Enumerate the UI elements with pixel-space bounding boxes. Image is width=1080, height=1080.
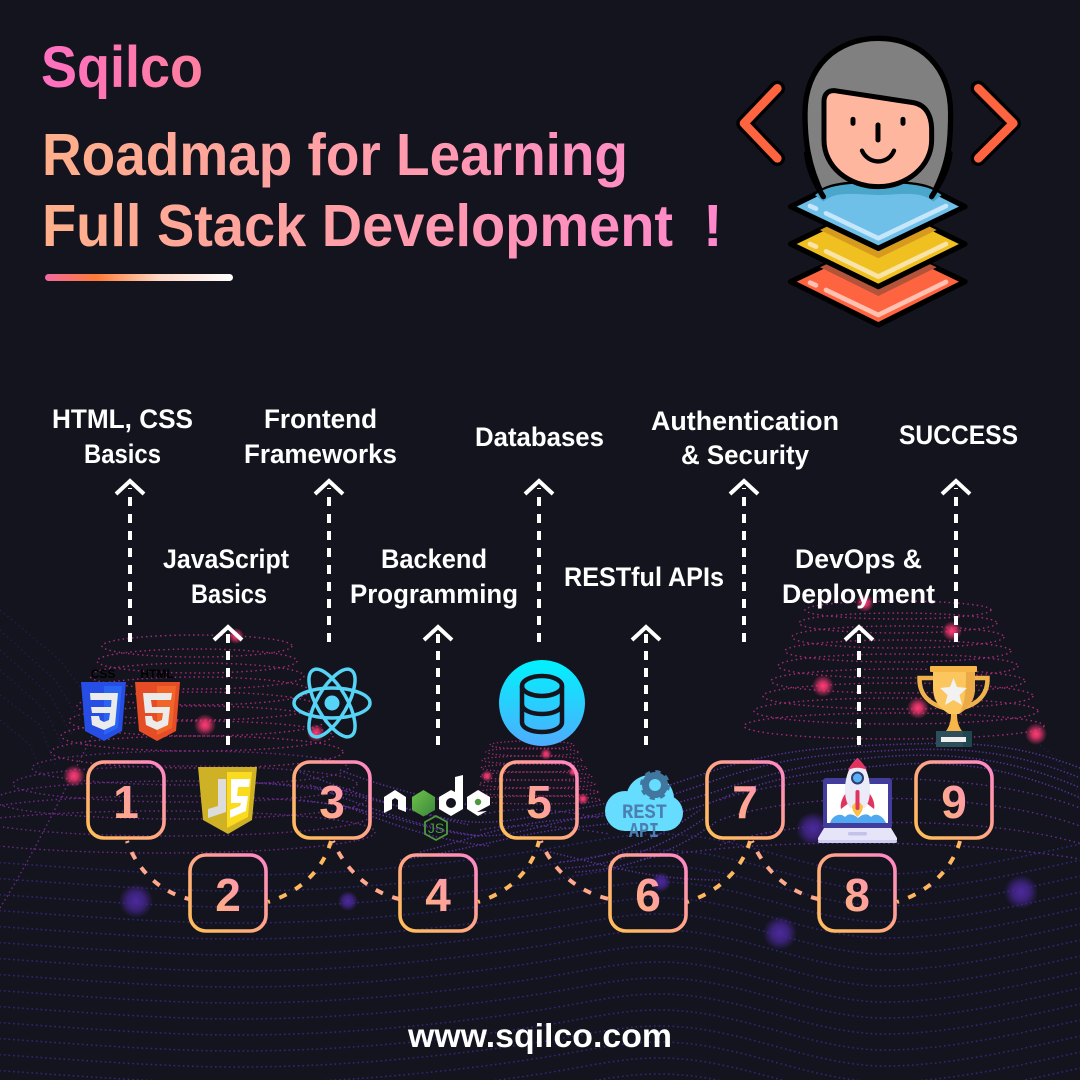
step 7 label: & Security	[681, 440, 809, 470]
icon: HTML5 shield	[135, 667, 180, 741]
step 2 label: Basics	[191, 579, 267, 609]
icon: REST API cloud: API	[629, 821, 659, 844]
step 9 box	[916, 762, 992, 838]
dotted wave background	[0, 601, 1080, 1080]
step 4 box	[400, 855, 476, 931]
icon: rocket launching from laptop	[818, 758, 897, 843]
step 6 label: RESTful APIs	[564, 562, 724, 592]
step 5 label: Databases	[475, 422, 604, 452]
step 7 box	[707, 762, 783, 838]
step 8 box: 8	[844, 869, 870, 921]
icon: CSS3 shield: CSS	[91, 667, 115, 681]
purple ridges	[255, 743, 1080, 880]
step 6 box: 6	[635, 869, 661, 921]
arrow: step 7	[730, 481, 758, 642]
icon: Node.js logo: JS	[428, 820, 444, 836]
title underline	[45, 274, 233, 281]
glowing particles	[63, 594, 1047, 950]
icon: database circle	[499, 660, 585, 746]
title	[42, 122, 723, 259]
step 2 box	[190, 855, 266, 931]
right mountain	[744, 601, 1044, 739]
step 1 box	[88, 762, 164, 838]
title: !	[703, 193, 723, 259]
step 8 label: Deployment	[782, 579, 935, 609]
icon: JavaScript shield	[198, 767, 257, 834]
icon: Node.js logo	[384, 775, 490, 840]
arrow: step 3	[315, 481, 343, 642]
step 4 label	[350, 544, 518, 609]
step 5 box	[501, 762, 577, 838]
icon: trophy	[919, 666, 988, 747]
arrow: step 4	[424, 627, 452, 745]
step 7 box: 7	[732, 776, 758, 828]
icon: React atom	[294, 663, 370, 743]
step 3 label: Frontend	[264, 404, 377, 434]
step 8 label: DevOps &	[795, 544, 922, 574]
step 8 box	[819, 855, 895, 931]
centre mountain	[476, 741, 600, 804]
step 9 label: SUCCESS	[899, 420, 1018, 450]
arrow: step 9	[942, 481, 970, 642]
step 8 label	[782, 544, 935, 609]
step 4 label: Programming	[350, 579, 518, 609]
title: Roadmap for Learning	[42, 122, 628, 188]
step 2 label	[163, 544, 289, 609]
step 3 box: 3	[319, 776, 345, 828]
arrow: step 8	[845, 627, 873, 745]
step 5 box: 5	[526, 776, 552, 828]
brand name: Sqilco	[41, 35, 203, 100]
website footer: www.sqilco.com	[407, 1017, 672, 1054]
step 2 box: 2	[215, 869, 241, 921]
arrow: step 6	[632, 627, 660, 745]
arrow: step 5	[525, 481, 553, 642]
step 1 label: Basics	[84, 439, 161, 469]
dashed connectors between steps	[127, 841, 960, 902]
step 2 label: JavaScript	[163, 544, 289, 574]
step 7 label: Authentication	[651, 406, 839, 436]
icon: REST API cloud	[605, 772, 683, 844]
step 1 label	[52, 404, 193, 469]
title: Full Stack Development	[42, 193, 673, 259]
step 4 label: Backend	[381, 544, 487, 574]
left mountain	[51, 635, 343, 768]
step 3 label: Frameworks	[244, 439, 397, 469]
step 1 label: HTML, CSS	[52, 404, 193, 434]
icon: developer with layers	[744, 38, 1013, 325]
icon: REST API cloud: REST	[622, 802, 667, 825]
step 3 box	[294, 762, 370, 838]
step 6 box	[610, 855, 686, 931]
step 3 label	[244, 404, 397, 469]
number boxes	[88, 762, 992, 931]
step 1 box: 1	[113, 776, 139, 828]
step 9 box: 9	[941, 776, 967, 828]
arrow: step 2	[214, 627, 242, 745]
icon: HTML5 shield: HTML	[140, 667, 174, 681]
step labels	[52, 404, 1018, 609]
icon: CSS3 shield	[81, 667, 126, 741]
step 7 label	[651, 406, 839, 470]
step 4 box: 4	[425, 869, 451, 921]
arrow: step 1	[116, 481, 144, 642]
